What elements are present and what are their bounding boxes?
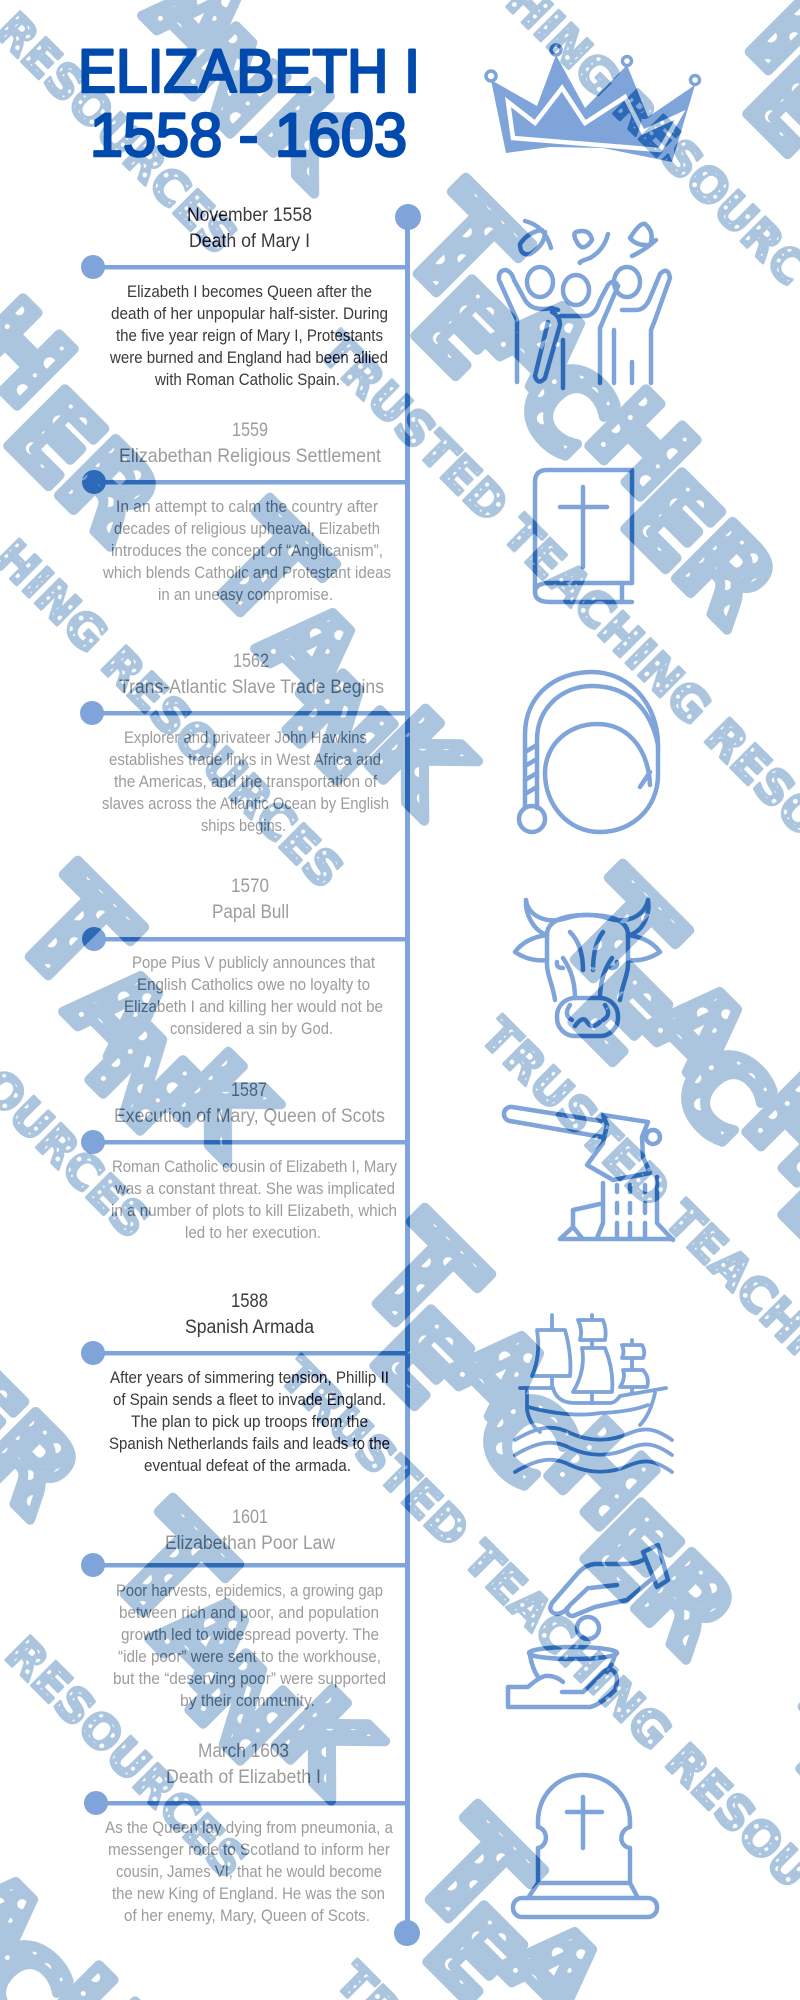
body text: 1570 <box>124 953 383 1038</box>
icon: galleon ship <box>515 1315 672 1472</box>
body text: November 1558 <box>109 282 388 389</box>
body text: March 1603: of her enemy, Mary, Queen of Scots. <box>124 1906 370 1925</box>
body text: 1588: After years of simmering tension, Phillip II <box>110 1368 389 1387</box>
title: 1558 - 1603 <box>90 101 407 169</box>
watermark: Teacher Tank trusted teaching resources: K <box>146 1029 300 1182</box>
watermark: Teacher Tank trusted teaching resources: T <box>381 1784 564 1967</box>
heading: 1588: Spanish Armada <box>185 1317 314 1338</box>
heading: 1559: 1559 <box>232 420 268 441</box>
watermark: Teacher Tank trusted teaching resources: C <box>451 1365 598 1512</box>
heading: March 1603 <box>166 1741 321 1788</box>
body text: 1559: in an uneasy compromise. <box>158 585 333 604</box>
icon: axe and block <box>504 1107 673 1240</box>
event: 1588 <box>81 1291 407 1475</box>
watermark: Teacher Tank trusted teaching resources: A <box>623 955 774 1106</box>
connector: March 1603 <box>84 1791 407 1815</box>
connector: 1601 <box>81 1553 407 1577</box>
event: 1559 <box>82 420 407 604</box>
body text: November 1558: the five year reign of Mary I, Protestants <box>116 326 383 345</box>
heading: 1570: Papal Bull <box>212 902 289 923</box>
watermark: Teacher Tank trusted teaching resources: RESOURCES <box>0 1627 257 1890</box>
body text: 1570: English Catholics owe no loyalty to <box>137 975 370 994</box>
body text: 1587: led to her execution. <box>185 1223 321 1242</box>
heading: 1562: 1562 <box>233 651 269 672</box>
icon: hand giving coin to bowl <box>508 1545 668 1707</box>
watermark: Teacher Tank trusted teaching resources: N <box>154 4 309 159</box>
heading: 1601: Elizabethan Poor Law <box>165 1533 335 1554</box>
watermark: Teacher Tank trusted teaching resources: C <box>492 335 639 482</box>
watermark: Teacher Tank trusted teaching resources: T <box>328 1188 511 1371</box>
body text: 1601: but the “deserving poor” were supported <box>113 1669 386 1688</box>
body text: 1562: the Americas, and the transportation of <box>114 772 377 791</box>
heading: 1562 <box>119 651 384 698</box>
watermark: Teacher Tank trusted teaching resources: H <box>523 1397 678 1552</box>
body text: 1588: of Spain sends a fleet to invade England. <box>113 1390 386 1409</box>
body text: 1587: Roman Catholic cousin of Elizabeth I, Mary <box>112 1157 397 1176</box>
connector: 1587 <box>81 1130 407 1154</box>
timeline spine <box>394 204 421 1946</box>
heading: 1587 <box>114 1080 385 1127</box>
body text: 1601: Poor harvests, epidemics, a growing gap <box>116 1581 383 1600</box>
watermark: Teacher Tank trusted teaching resources: T <box>76 1478 259 1661</box>
icon: whip <box>519 672 658 832</box>
watermark: Teacher Tank trusted teaching resources: N <box>64 1001 219 1156</box>
watermark: Teacher Tank trusted teaching resources: A <box>130 1566 281 1717</box>
body text: 1588: Spanish Netherlands fails and leads to the <box>109 1434 390 1453</box>
watermark: Teacher Tank trusted teaching resources: T <box>173 478 356 661</box>
watermark: Teacher Tank trusted teaching resources: A <box>466 269 617 420</box>
watermark: Teacher Tank trusted teaching resources: H <box>564 367 719 522</box>
body text: 1559: which blends Catholic and Protestant ideas <box>102 563 391 582</box>
body text: 1587 <box>111 1157 397 1242</box>
watermark: Teacher Tank trusted teaching resources: E <box>547 943 690 1086</box>
body text: 1559: In an attempt to calm the country after <box>116 497 378 516</box>
body text: 1601: between rich and poor, and population <box>119 1603 379 1622</box>
body text: 1570: Elizabeth I and killing her would not be <box>124 997 383 1016</box>
body text: November 1558: were burned and England had been allied <box>109 348 388 367</box>
watermark: Teacher Tank trusted teaching resources: A <box>236 576 387 727</box>
body text: March 1603 <box>105 1818 393 1925</box>
heading: 1588: 1588 <box>231 1291 268 1312</box>
body text: 1562: Explorer and privateer John Hawkins <box>124 728 367 747</box>
heading: November 1558: Death of Mary I <box>189 231 310 252</box>
watermark: Teacher Tank trusted teaching resources: K <box>233 59 387 212</box>
connector: November 1558 <box>81 255 407 279</box>
body text: 1588: The plan to pick up troops from the <box>131 1412 368 1431</box>
body text: 1559 <box>102 497 391 604</box>
icon: bull head <box>515 900 660 1036</box>
watermark: Teacher Tank trusted teaching resources: N <box>261 651 416 806</box>
event: 1562 <box>80 651 407 835</box>
watermark: Teacher Tank trusted teaching resources: R <box>650 499 800 650</box>
icon: bible <box>535 470 632 602</box>
heading: 1601: 1601 <box>232 1507 268 1528</box>
body text: 1562: slaves across the Atlantic Ocean by English <box>102 794 389 813</box>
heading: March 1603: March 1603 <box>198 1741 289 1762</box>
heading: 1562: Trans-Atlantic Slave Trade Begins <box>119 677 384 698</box>
event: March 1603 <box>84 1741 407 1925</box>
heading: 1559: Elizabethan Religious Settlement <box>119 446 382 467</box>
body text: 1559: introduces the concept of “Anglicanism”, <box>111 541 383 560</box>
watermark: Teacher Tank trusted teaching resources: E <box>559 1480 702 1623</box>
connector: 1562 <box>80 701 407 725</box>
heading: November 1558: November 1558 <box>187 205 312 226</box>
body text: 1588 <box>109 1368 390 1475</box>
title <box>78 37 420 169</box>
body text: 1587: was a constant threat. She was implicated <box>114 1179 395 1198</box>
body text: 1601: by their community. <box>180 1691 315 1710</box>
body text: 1559: decades of religious upheaval, Elizabeth <box>114 519 380 538</box>
heading: March 1603: Death of Elizabeth I <box>166 1767 321 1788</box>
body text: 1601 <box>113 1581 386 1710</box>
body text: March 1603: As the Queen lay dying from pneumonia, a <box>105 1818 393 1837</box>
body text: 1570: Pope Pius V publicly announces that <box>132 953 375 972</box>
heading: 1570 <box>212 876 289 923</box>
body text: November 1558: death of her unpopular half-sister. During <box>111 304 388 323</box>
heading: 1588 <box>185 1291 314 1338</box>
heading: 1559 <box>119 420 382 467</box>
event: November 1558 <box>81 205 407 389</box>
connector: 1570 <box>82 927 407 951</box>
watermark: Teacher Tank trusted teaching resources: K <box>343 686 497 839</box>
body text: 1562: ships begins. <box>201 816 286 835</box>
watermark: Teacher Tank trusted teaching resources: E <box>390 257 533 400</box>
body text: 1570: considered a sin by God. <box>170 1019 333 1038</box>
heading: 1587: 1587 <box>231 1080 267 1101</box>
event: 1601 <box>81 1507 407 1710</box>
body text: 1562: establishes trade links in West Africa and <box>109 750 381 769</box>
body text: 1588: eventual defeat of the armada. <box>144 1456 351 1475</box>
watermark: Teacher Tank trusted teaching resources: A <box>44 939 195 1090</box>
title: ELIZABETH I <box>78 37 420 105</box>
heading: 1570: 1570 <box>231 876 269 897</box>
body text: March 1603: messenger rode to Scotland to inform her <box>108 1840 390 1859</box>
body text: 1562 <box>102 728 389 835</box>
watermark: Teacher Tank trusted teaching resources: R <box>33 416 184 567</box>
body text: March 1603: cousin, James VI, that he would become <box>116 1862 382 1881</box>
watermark: Teacher Tank trusted teaching resources: C <box>649 1021 796 1168</box>
connector: 1588 <box>81 1341 407 1365</box>
watermark: Teacher Tank trusted teaching resources: N <box>164 1631 319 1786</box>
watermark: Teacher Tank trusted teaching resources: K <box>250 1666 404 1819</box>
watermark: Teacher Tank trusted teaching resources: E <box>349 1287 492 1430</box>
connector: 1559 <box>82 470 407 494</box>
watermark: Teacher Tank trusted teaching resources: T <box>526 844 709 1027</box>
watermark: Teacher Tank trusted teaching resources: T <box>369 158 552 341</box>
heading: November 1558 <box>187 205 312 252</box>
body text: November 1558: Elizabeth I becomes Queen after the <box>127 282 372 301</box>
heading: 1601 <box>165 1507 335 1554</box>
event: 1587 <box>81 1080 407 1242</box>
watermark: Teacher Tank trusted teaching resources: R <box>609 1529 760 1680</box>
body text: 1601: “idle poor” were sent to the workhouse, <box>118 1647 381 1666</box>
body text: 1587: in a number of plots to kill Elizabeth, which <box>111 1201 397 1220</box>
body text: March 1603: the new King of England. He was the son <box>112 1884 385 1903</box>
heading: 1587: Execution of Mary, Queen of Scots <box>114 1106 385 1127</box>
watermark: Teacher Tank trusted teaching resources: E <box>600 450 743 593</box>
event: 1570 <box>82 876 407 1038</box>
icon: crown <box>486 45 700 162</box>
icon: tombstone <box>513 1775 657 1917</box>
body text: 1601: growth led to widespread poverty. The <box>121 1625 379 1644</box>
body text: November 1558: with Roman Catholic Spain. <box>154 370 340 389</box>
icon: celebrating people <box>499 221 670 388</box>
watermark: Teacher Tank trusted teaching resources: A <box>425 1299 576 1450</box>
